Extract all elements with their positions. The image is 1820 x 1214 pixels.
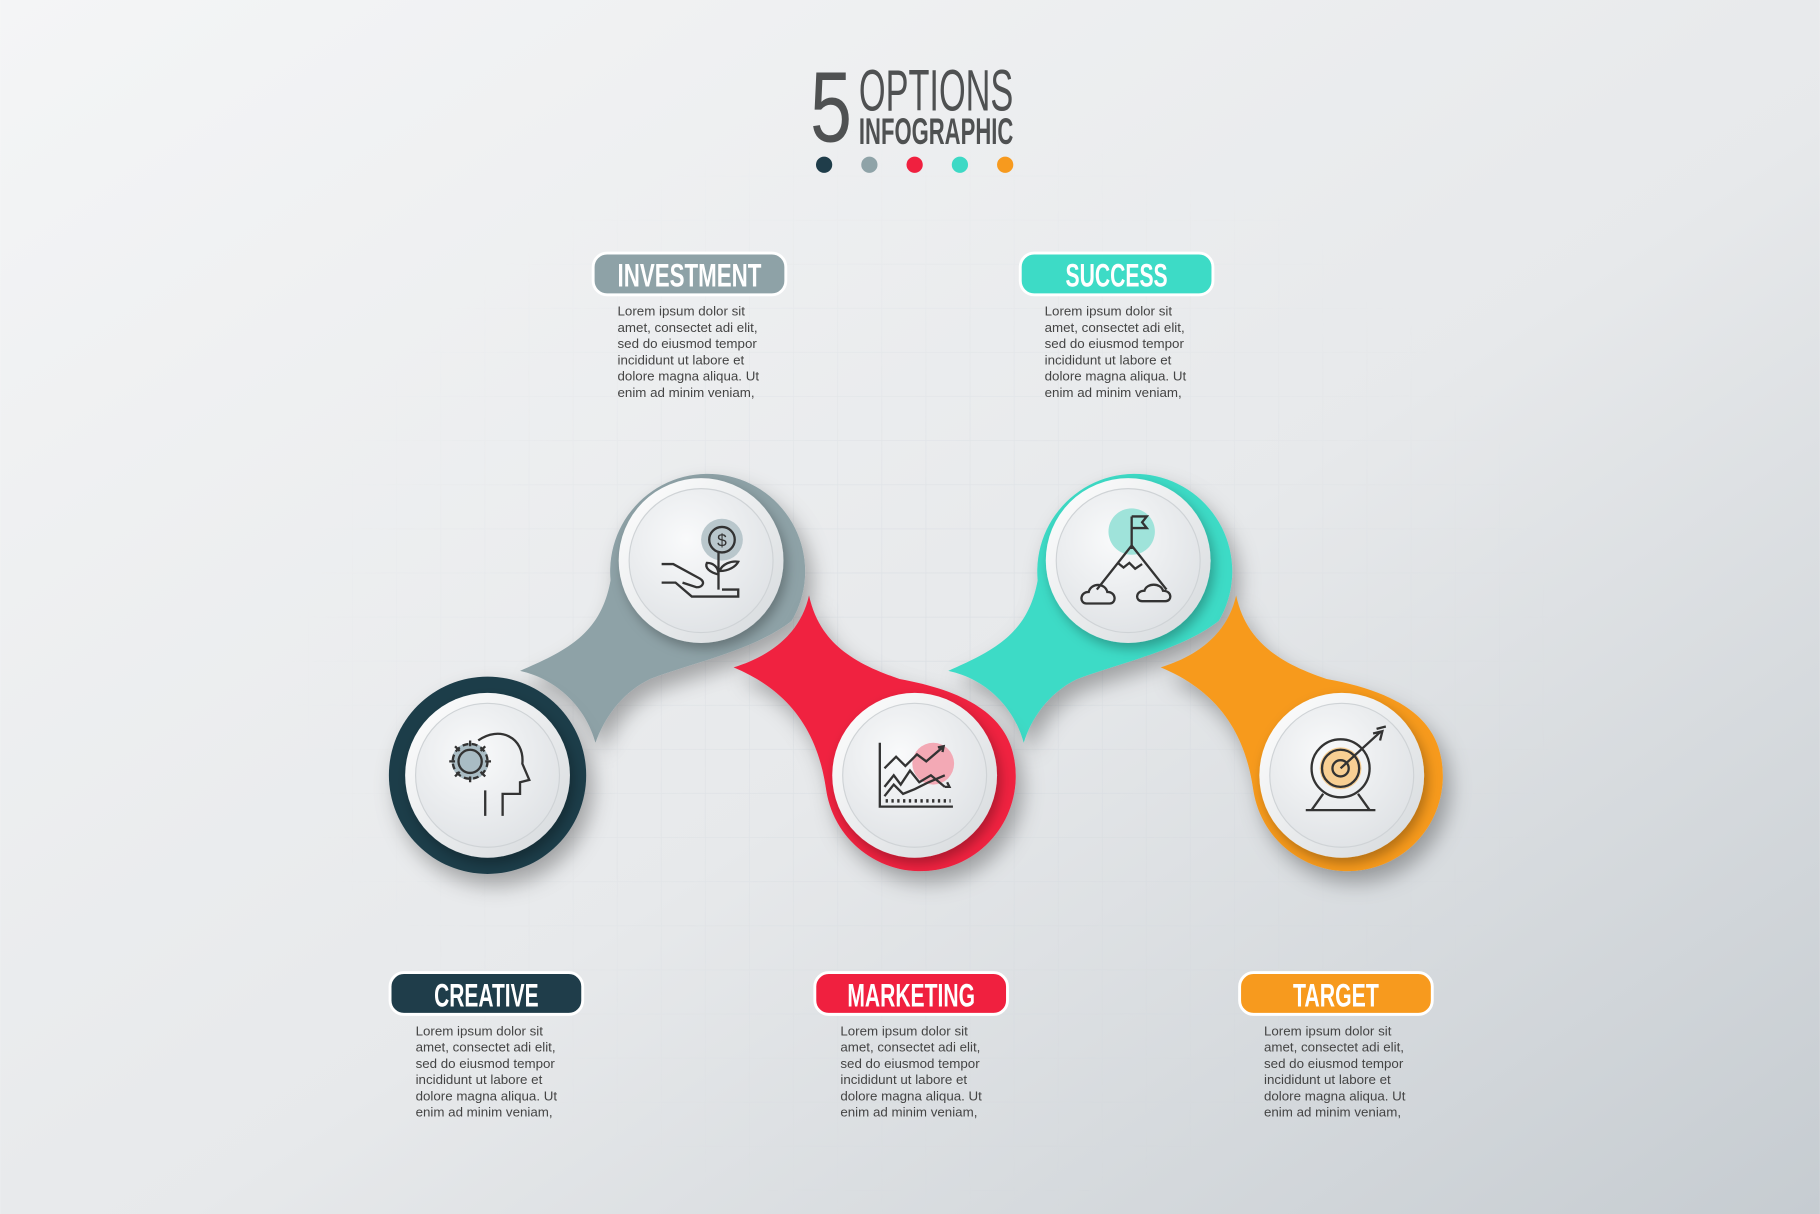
text: target: Lorem ipsum dolor sit (1264, 1023, 1392, 1038)
text: investment: amet, consectet adi elit, (618, 320, 758, 335)
circle: target (1259, 693, 1424, 858)
label: success: SUCCESS (1066, 258, 1168, 294)
text: success: dolore magna aliqua. Ut (1045, 369, 1186, 384)
text: marketing: dolore magna aliqua. Ut (840, 1088, 982, 1103)
text: creative: sed do eiusmod tempor (416, 1056, 555, 1071)
text: marketing: amet, consectet adi elit, (840, 1040, 980, 1055)
icon: mountain with flag (1081, 508, 1170, 604)
shape: marketing (red) (734, 595, 1016, 871)
circle: investment (619, 478, 783, 643)
icon: head with gear (449, 734, 529, 816)
text: target (1264, 1023, 1406, 1120)
text: target: amet, consectet adi elit, (1264, 1040, 1404, 1055)
text: investment: sed do eiusmod tempor (618, 336, 757, 351)
title: 5 (810, 53, 852, 164)
color dots (816, 157, 1013, 173)
text: success: enim ad minim veniam, (1045, 385, 1182, 400)
text: creative: incididunt ut labore et (416, 1072, 543, 1087)
label: investment (593, 253, 786, 295)
text: success: Lorem ipsum dolor sit (1045, 304, 1172, 319)
shape: success (teal) (948, 474, 1232, 743)
icon: hand with coin plant: $ (717, 531, 727, 551)
text: investment: incididunt ut labore et (618, 352, 745, 367)
text: marketing: Lorem ipsum dolor sit (840, 1023, 968, 1038)
shape: investment (gray) (520, 474, 805, 743)
text: creative: amet, consectet adi elit, (416, 1040, 556, 1055)
circle: success (1046, 478, 1211, 643)
text: marketing (840, 1023, 982, 1120)
label: creative (390, 973, 583, 1014)
title: OPTIONS (859, 58, 1013, 123)
text: marketing: enim ad minim veniam, (840, 1105, 977, 1120)
icon: hand with coin plant (662, 519, 743, 597)
text: marketing: incididunt ut labore et (840, 1072, 967, 1087)
text: success: sed do eiusmod tempor (1045, 336, 1184, 351)
text: investment: enim ad minim veniam, (618, 385, 755, 400)
text: investment: Lorem ipsum dolor sit (618, 304, 745, 319)
circle: creative (405, 693, 570, 858)
label: marketing: MARKETING (847, 977, 975, 1013)
text: creative: dolore magna aliqua. Ut (416, 1088, 557, 1103)
text: target: sed do eiusmod tempor (1264, 1056, 1404, 1071)
icon: chart with arrows (880, 743, 954, 807)
text: success (1045, 304, 1186, 400)
label: target (1240, 973, 1432, 1014)
shape: creative (dark ring) (389, 677, 586, 874)
label: target: TARGET (1293, 977, 1379, 1013)
icon: target with arrow (1306, 727, 1386, 810)
label: success (1020, 253, 1213, 295)
circle: marketing (832, 693, 997, 858)
text: investment: dolore magna aliqua. Ut (618, 369, 759, 384)
text: marketing: sed do eiusmod tempor (840, 1056, 980, 1071)
text: investment (618, 304, 759, 400)
label: creative: CREATIVE (434, 977, 539, 1013)
title (810, 53, 1013, 164)
text: target: dolore magna aliqua. Ut (1264, 1088, 1406, 1103)
text: target: incididunt ut labore et (1264, 1072, 1391, 1087)
label: investment: INVESTMENT (618, 258, 762, 294)
text: creative: enim ad minim veniam, (416, 1105, 553, 1120)
shape: target (orange) (1161, 595, 1443, 871)
label: marketing (815, 973, 1007, 1014)
text: target: enim ad minim veniam, (1264, 1105, 1401, 1120)
text: success: amet, consectet adi elit, (1045, 320, 1185, 335)
text: creative (416, 1023, 557, 1120)
text: creative: Lorem ipsum dolor sit (416, 1023, 543, 1038)
title: INFOGRAPHIC (859, 110, 1013, 152)
text: success: incididunt ut labore et (1045, 352, 1172, 367)
